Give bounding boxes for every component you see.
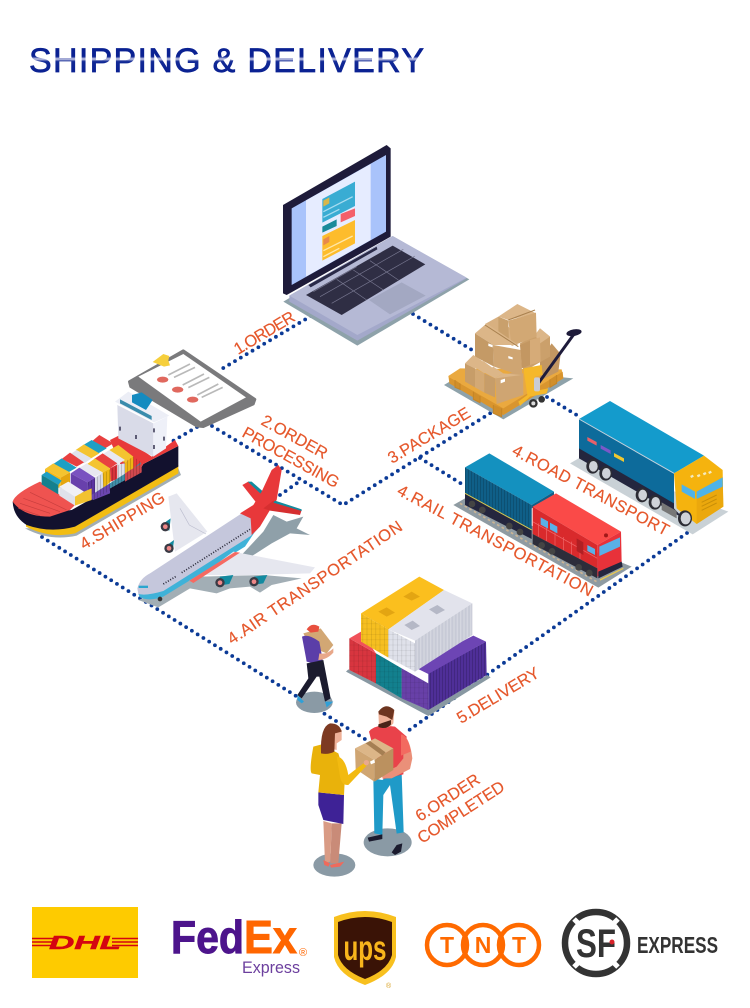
logo: TNT: T — [512, 932, 526, 958]
logo: FedEx Express: Ex — [244, 911, 297, 963]
icon: boxes on pallet — [444, 304, 582, 419]
icon: road truck — [570, 401, 728, 534]
label: 6.order completed: 6.ORDER — [412, 770, 483, 825]
label: 4.rail transportation: 4.RAIL TRANSPORTATION — [394, 482, 596, 600]
logo: UPS — [334, 911, 396, 990]
icon: clipboard — [129, 351, 255, 427]
logo: DHL: DHL — [49, 933, 121, 953]
icon: airplane — [137, 465, 315, 607]
logo: FedEx Express: Fed — [171, 911, 244, 963]
icon: freight train — [453, 453, 632, 588]
icon: container ship — [13, 392, 181, 538]
label: 4.shipping: 4.SHIPPING — [77, 489, 168, 553]
logo: UPS: ups — [344, 929, 386, 968]
icon: laptop — [283, 145, 469, 346]
title: SHIPPING & DELIVERY — [29, 42, 424, 80]
icon: stacked containers — [346, 577, 491, 716]
logo: SF Express: EXPRESS — [637, 932, 718, 958]
label: 2.order processing: PROCESSING — [239, 424, 342, 492]
ship containers — [42, 435, 142, 506]
label: 4.air transportation: 4.AIR TRANSPORTATION — [224, 518, 406, 648]
dotted route lines — [42, 314, 687, 741]
label: 4.road transport: 4.ROAD TRANSPORT — [509, 442, 672, 540]
icon: courier carrying box — [296, 625, 333, 713]
carrier logos — [32, 907, 718, 990]
logo: TNT: T — [440, 932, 454, 958]
label: 3.package: 3.PACKAGE — [385, 404, 474, 467]
logo: SF Express: SF — [576, 922, 616, 966]
label: 5.delivery: 5.DELIVERY — [454, 664, 543, 727]
label: 6.order completed: COMPLETED — [414, 778, 508, 847]
label: 2.order processing: 2.ORDER — [258, 412, 331, 463]
logo: DHL — [32, 907, 138, 978]
logo: TNT — [427, 925, 539, 965]
icon: man receiving parcel — [355, 706, 412, 856]
logo: SF Express — [565, 912, 718, 974]
logo: UPS: ® — [386, 982, 392, 990]
logo: FedEx Express: ® — [299, 947, 307, 959]
logo: TNT: N — [475, 932, 491, 958]
label: 1.order: 1.ORDER — [231, 308, 298, 358]
logo: FedEx Express — [171, 911, 307, 977]
icon: woman handing parcel — [311, 723, 369, 877]
logo: FedEx Express: Express — [242, 958, 300, 977]
